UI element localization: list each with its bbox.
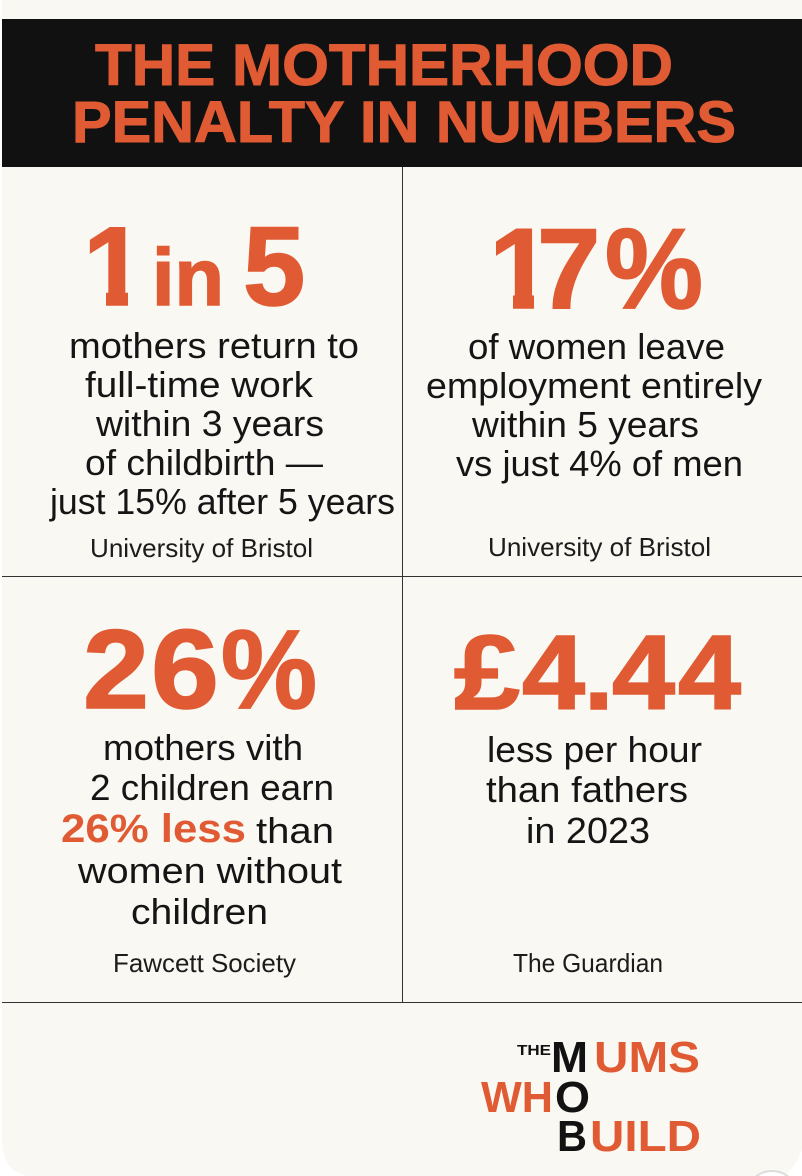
panel: £4.44 less per hour xyxy=(454,614,741,978)
title banner xyxy=(2,19,802,167)
big stat: 1 in 5: 5 xyxy=(243,204,305,329)
big stat: 1 in 5: in xyxy=(152,233,224,323)
logo: The Mums Who Build: O xyxy=(555,1073,590,1122)
big stat: £4.44: 4 xyxy=(678,614,741,732)
source: University of Bristol xyxy=(488,532,711,562)
source: University of Bristol xyxy=(90,533,313,563)
description text: full-time work xyxy=(85,364,314,405)
description text: just 15% after 5 years xyxy=(49,481,395,522)
source: Fawcett Society xyxy=(113,948,296,978)
description text: than xyxy=(256,810,334,851)
big stat: 17%: 1 xyxy=(489,206,552,333)
logo: The Mums Who Build: B xyxy=(557,1112,587,1161)
description text: vs just 4% of men xyxy=(456,443,743,484)
logo: The Mums Who Build: THE xyxy=(517,1042,551,1059)
big stat: 1 in 5 xyxy=(82,204,305,329)
source: The Guardian xyxy=(513,948,663,978)
description text: 2 children earn xyxy=(90,767,334,808)
title line 1: THE MOTHERHOOD xyxy=(95,33,673,98)
description text: women without xyxy=(77,850,342,891)
big stat: 26% xyxy=(83,607,317,732)
description text: of childbirth — xyxy=(85,442,323,483)
big stat: 17%: 7 xyxy=(537,206,600,333)
description text: within 5 years xyxy=(471,404,699,445)
panel: 1 in 5 mothers xyxy=(49,204,395,563)
big stat: 26%: 2 xyxy=(83,607,149,732)
description text: in 2023 xyxy=(526,810,650,851)
big stat: £4.44: . xyxy=(584,614,613,732)
big stat: 26%: 6 xyxy=(151,607,219,732)
description text: children xyxy=(131,891,268,932)
big stat: £4.44: 4 xyxy=(522,614,585,732)
panel: 26% mothers with 2 children xyxy=(61,607,342,978)
description text: mothers return to xyxy=(69,325,359,366)
description text: of women leave xyxy=(468,326,725,367)
logo: The Mums Who Build: UILD xyxy=(590,1112,701,1161)
description text xyxy=(486,729,702,851)
description text xyxy=(49,325,395,522)
big stat: 26%: % xyxy=(221,607,317,732)
big stat: 17% xyxy=(488,206,703,333)
corner badge outline xyxy=(746,1171,798,1176)
description text xyxy=(61,727,342,932)
description text: less per hour xyxy=(487,729,702,770)
big stat: £4.44 xyxy=(454,614,741,732)
description text: within 3 years xyxy=(95,403,324,444)
big stat: £4.44: £ xyxy=(454,614,520,732)
logo: The Mums Who Build: WH xyxy=(481,1073,553,1122)
description text: mothers vith xyxy=(103,727,303,768)
description text: 26% less xyxy=(61,807,246,851)
panel: 17% of women xyxy=(426,206,762,562)
logo: The Mums Who Build xyxy=(481,1033,701,1161)
logo: The Mums Who Build: M xyxy=(551,1033,588,1082)
big stat: £4.44: 4 xyxy=(612,614,675,732)
description text xyxy=(426,326,762,484)
big stat: 1 in 5: 1 xyxy=(83,204,145,329)
title line 2: PENALTY IN NUMBERS xyxy=(72,90,736,155)
description text: employment entirely xyxy=(426,365,762,406)
logo: The Mums Who Build: UMS xyxy=(594,1033,700,1082)
description text: than fathers xyxy=(486,769,688,810)
big stat: 17%: % xyxy=(605,206,703,333)
